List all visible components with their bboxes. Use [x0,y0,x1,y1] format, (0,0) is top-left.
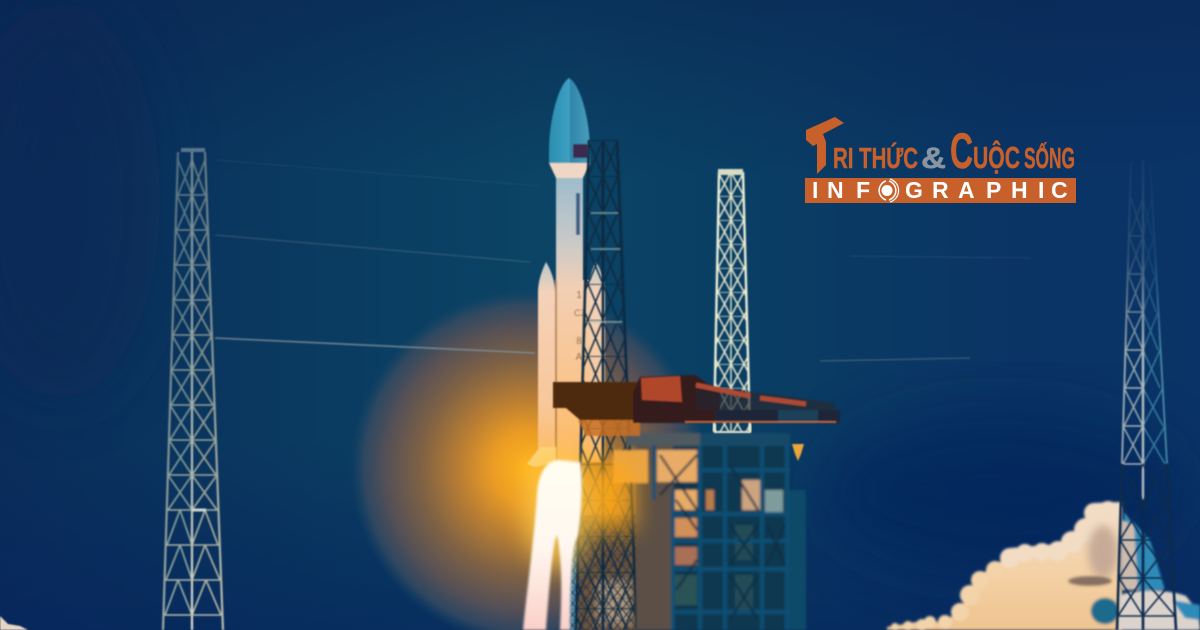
launch tower lower base lattice [568,515,638,630]
exhaust cloud [887,501,1122,630]
white service tower [714,169,750,432]
rocket: vertical lettering [574,193,586,363]
rocket: core stage [555,178,590,462]
exhaust plume [523,450,592,630]
rocket: booster skirt [527,447,556,467]
right tower lower dark section [1117,464,1176,630]
building: steel frame [654,445,790,630]
logo: Tri Thuc & Cuoc Song Infographic [805,117,1076,203]
logo: wordmark: RI THỨC [833,141,918,175]
rocket: vertical lettering: CZ [574,308,586,318]
hot reflected light on tower [582,462,634,530]
logo: T mark [806,117,844,174]
logo: infographic banner [805,178,1076,203]
logo: concentric O icon [879,179,899,202]
cloud seen behind right tower [1118,512,1200,630]
rocket: side boosters [538,262,605,462]
logo: wordmark: & [921,142,946,175]
logo: wordmark: SỐNG [1024,141,1075,175]
rocket: vertical lettering: 8 [576,336,582,347]
right lattice tower [1122,160,1167,500]
rocket: nose fairing [549,78,590,163]
logo: banner text continued: GRAPHIC [905,177,1068,203]
rocket [527,78,605,467]
logo: banner text: INF [812,177,870,203]
support cables [215,160,1030,361]
launch service building [613,433,806,630]
rocket: vertical lettering: 1 [576,290,582,301]
logo: wordmark [833,123,1075,179]
dark umbilical tower [575,140,637,630]
rocket: fairing flag [573,144,588,158]
engine glow halo [350,290,706,630]
logo: wordmark: UỘC [973,139,1020,175]
logo: wordmark: C [950,123,973,179]
left lattice tower [163,150,223,630]
bottom left smoke [0,616,28,630]
gantry crane platform [553,375,840,461]
building: lit windows [613,450,783,610]
rocket: payload adapter collar [549,163,590,178]
crane hook [792,444,804,461]
rocket: vertical lettering: A [576,352,583,363]
